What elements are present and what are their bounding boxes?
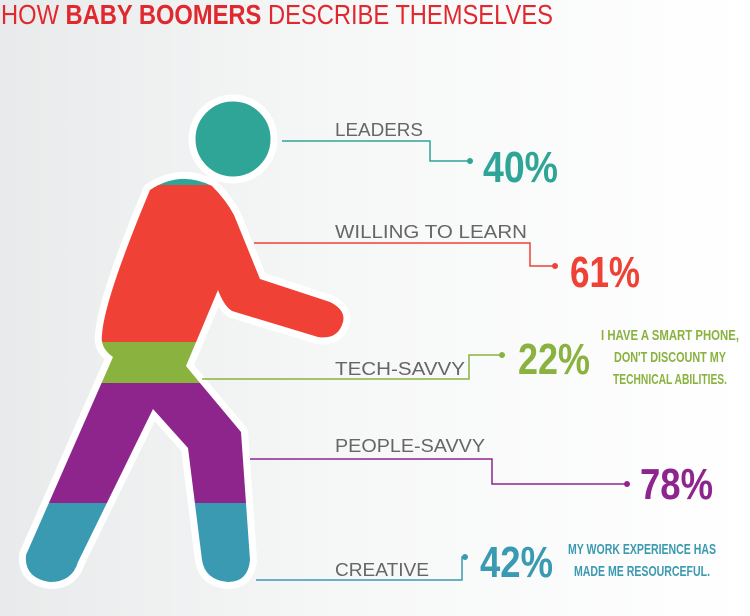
- row: creative: [256, 538, 716, 587]
- figure: walking person: [19, 94, 350, 589]
- row: tech-savvy: TECH-SAVVY: [335, 359, 465, 379]
- row: people-savvy: [250, 436, 713, 509]
- row: willing to learn: WILLING TO LEARN: [335, 222, 527, 242]
- row: creative: CREATIVE: [335, 560, 429, 580]
- row: willing to learn: 61%: [570, 248, 640, 297]
- row: creative: 42%: [480, 538, 553, 587]
- callout: work experience quote: [568, 541, 716, 580]
- row: leaders: 40%: [483, 143, 558, 192]
- row: leaders: LEADERS: [335, 120, 423, 140]
- row: people-savvy: 78%: [640, 460, 713, 509]
- row: leaders: [282, 120, 558, 192]
- row: people-savvy: PEOPLE-SAVVY: [335, 436, 485, 456]
- row: tech-savvy: 22%: [518, 335, 590, 384]
- row: tech-savvy: [202, 327, 739, 388]
- icon: head: [192, 98, 274, 180]
- row: willing to learn: [254, 222, 640, 297]
- callout: smart phone quote: [601, 327, 739, 388]
